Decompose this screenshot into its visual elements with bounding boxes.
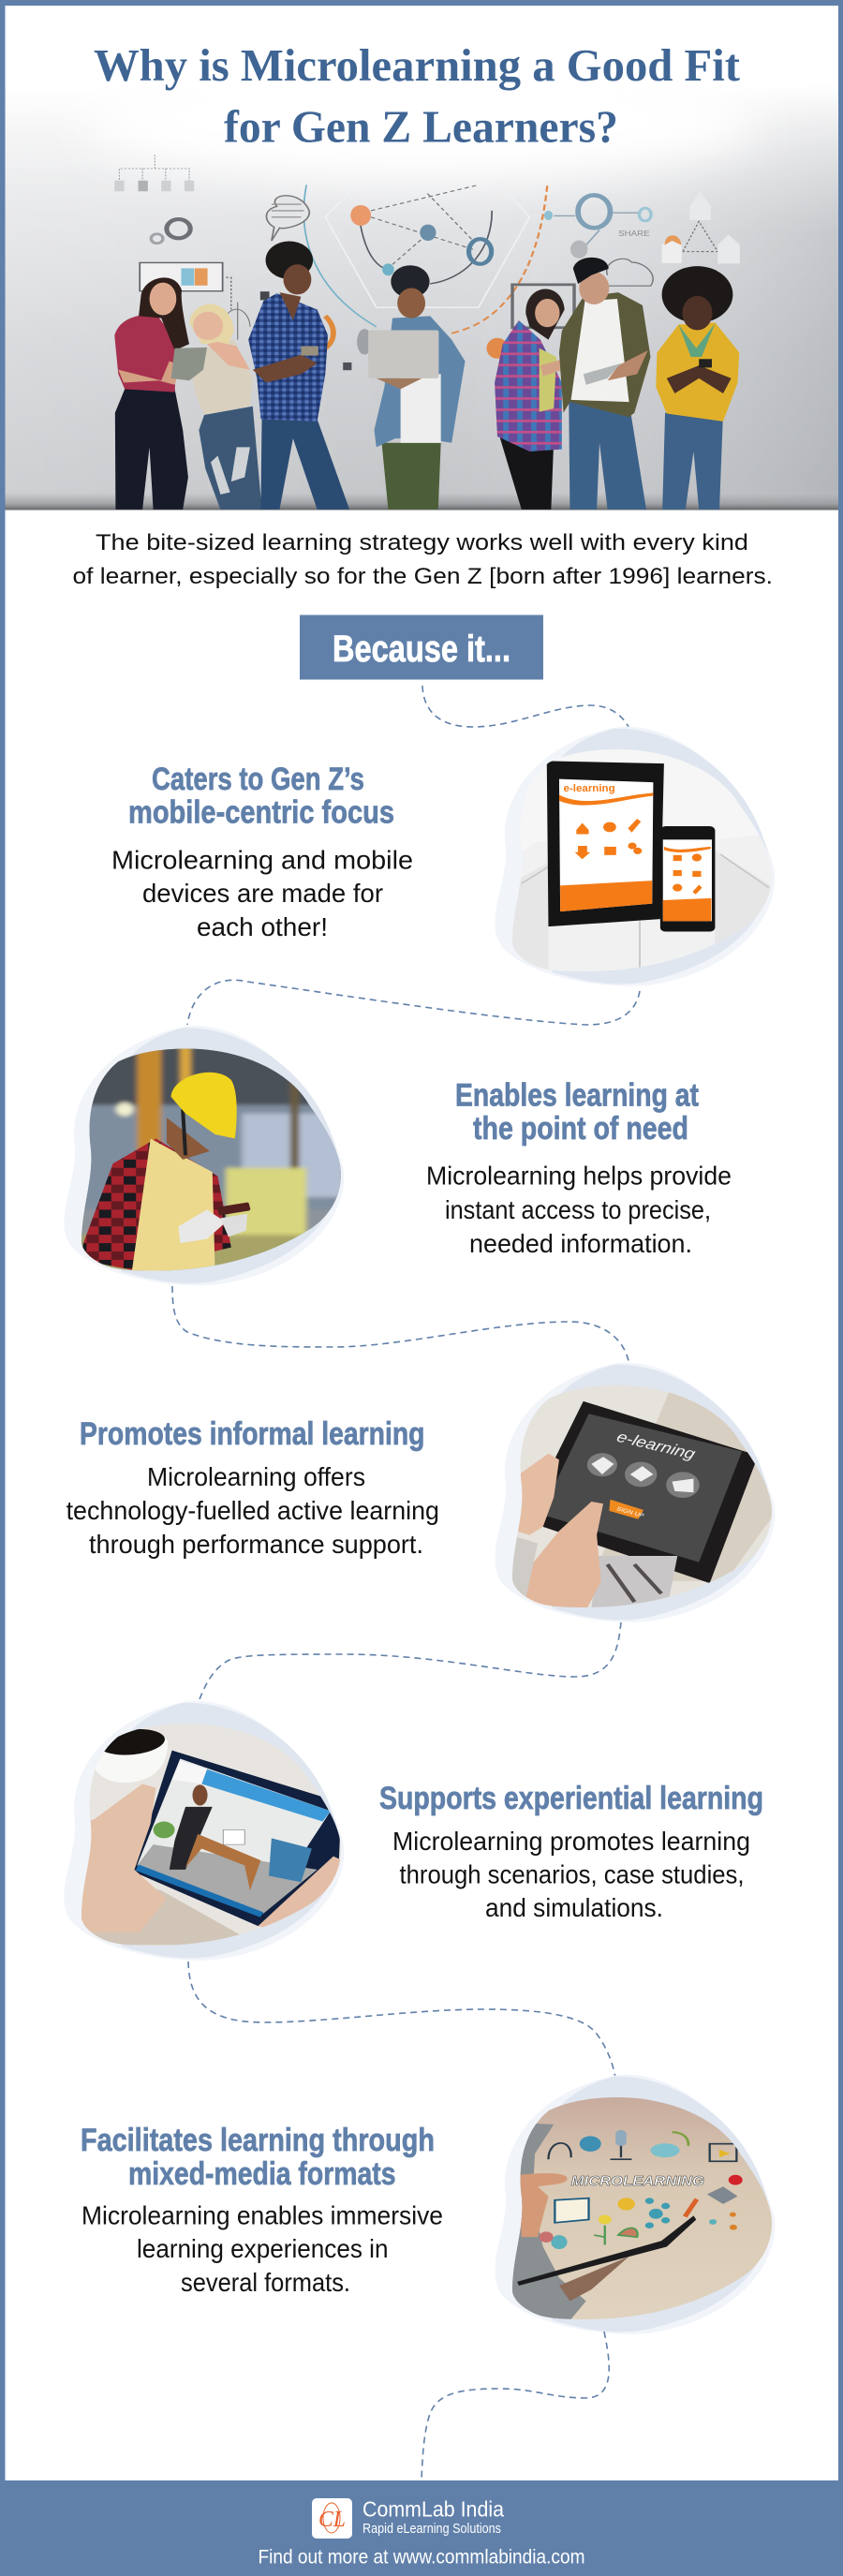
heading	[81, 2123, 435, 2192]
heading: mixed-media formats	[128, 2156, 395, 2192]
heading: Promotes informal learning	[80, 1416, 425, 1452]
panel: mixed-media formats	[81, 2075, 777, 2334]
logo: CommLab India	[312, 2497, 504, 2539]
title: Why is Microlearning a Good Fit	[94, 39, 741, 91]
photo: tablet and phone with e-learning app	[506, 745, 777, 975]
body text: instant access to precise,	[445, 1195, 711, 1224]
person 7: yellow cardigan	[656, 266, 739, 510]
because it banner: Because it...	[333, 629, 510, 670]
body text: learning experiences in	[137, 2234, 388, 2263]
heading: Caters to Gen Z’s	[152, 762, 364, 797]
connector 6	[422, 2332, 609, 2480]
logo: CommLab India: CommLab India	[362, 2497, 504, 2522]
body text: through performance support.	[89, 1530, 423, 1559]
intro text: of learner, especially so for the Gen Z [born after 1996] learners.	[73, 564, 773, 589]
connector 4	[199, 1622, 621, 1702]
body text: Microlearning offers	[147, 1462, 365, 1491]
person 3: blue plaid shirt	[248, 241, 349, 510]
heading: Enables learning at	[455, 1078, 699, 1114]
title	[94, 39, 741, 152]
website link text: Find out more at www.commlabindia.com	[259, 2546, 584, 2568]
background tech icons	[119, 155, 717, 340]
photo: hand tapping tablet showing e-learning: SIGN UP	[615, 1506, 645, 1519]
body text: Microlearning helps provide	[426, 1162, 732, 1191]
photo: tablet and phone with e-learning app: e-learning	[564, 782, 615, 794]
hero illustration: group of Gen Z learners	[6, 64, 838, 510]
person 4: turban and laptop	[368, 265, 466, 510]
blob backdrop 4	[64, 1701, 344, 1961]
body text	[392, 1827, 750, 1922]
photo: hand tapping tablet showing e-learning: e-learning	[614, 1428, 699, 1462]
blob backdrop 5	[495, 2075, 775, 2334]
body text: Microlearning and mobile	[111, 846, 413, 875]
body text: technology-fuelled active learning	[67, 1496, 439, 1525]
photo: hand tapping tablet showing e-learning	[506, 1382, 777, 1611]
heading	[455, 1078, 699, 1147]
blob backdrop 1	[495, 727, 775, 986]
panel: point of need	[64, 1026, 732, 1285]
body text	[67, 1462, 439, 1559]
connector 3	[172, 1286, 629, 1366]
person 5: plaid shirt woman	[495, 289, 589, 510]
panel: experiential learning	[64, 1701, 763, 1961]
hero illustration: group of Gen Z learners: SHARE	[618, 229, 650, 238]
person 6: cap and cardigan	[559, 258, 651, 510]
intro text	[73, 530, 773, 589]
body text	[81, 2201, 443, 2297]
panel: mobile-centric focus	[111, 727, 777, 986]
photo: hand holding tablet with doodle icons	[506, 2094, 777, 2323]
photo: hand holding tablet with doodle icons: MICROLEARNING	[571, 2173, 704, 2188]
body text: through scenarios, case studies,	[399, 1860, 744, 1889]
heading: mobile-centric focus	[128, 794, 394, 830]
blob backdrop 2	[64, 1026, 344, 1285]
intro text: The bite-sized learning strategy works well with every kind	[96, 530, 748, 555]
body text: each other!	[197, 912, 328, 941]
panel: informal learning	[67, 1363, 777, 1622]
heading: Facilitates learning through	[81, 2123, 435, 2158]
heading	[128, 762, 394, 830]
photo: worker in hard hat using phone	[75, 1044, 347, 1274]
logo: CommLab India: CL	[318, 2508, 346, 2532]
connector 1	[422, 686, 629, 729]
footer	[0, 2480, 843, 2576]
body text	[111, 846, 413, 941]
photo: tablet with e-learning scenario and coffee	[75, 1719, 347, 1948]
person 1: red shirt	[114, 277, 189, 510]
because it banner	[300, 614, 543, 680]
person 2: blonde woman	[171, 304, 262, 510]
body text	[426, 1162, 732, 1258]
blob backdrop 3	[495, 1363, 775, 1622]
title: for Gen Z Learners?	[224, 101, 618, 152]
connector 5	[188, 1962, 615, 2078]
connector 2	[187, 980, 640, 1025]
body text: and simulations.	[485, 1893, 663, 1922]
heading: Supports experiential learning	[379, 1781, 763, 1816]
body text: Microlearning promotes learning	[392, 1827, 750, 1856]
body text: devices are made for	[142, 879, 383, 908]
body text: Microlearning enables immersive	[81, 2201, 443, 2229]
logo: CommLab India: Rapid eLearning Solutions	[362, 2521, 501, 2537]
body text: needed information.	[469, 1229, 692, 1258]
heading: the point of need	[473, 1111, 688, 1147]
body text: several formats.	[181, 2268, 350, 2297]
